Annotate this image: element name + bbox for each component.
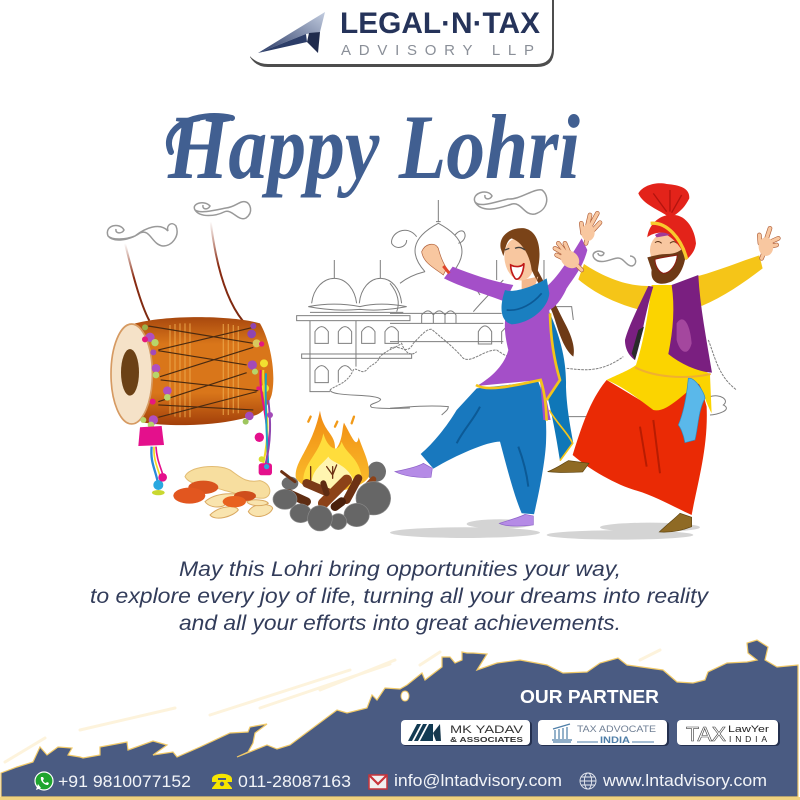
raised hand (581, 213, 600, 243)
icon: globe (580, 773, 596, 789)
drum with straps (111, 222, 273, 495)
logo icon: paper plane (258, 12, 325, 53)
woman smile (511, 263, 524, 279)
partners heading: OUR PARTNER (520, 686, 659, 707)
inner flame (303, 433, 362, 490)
decorative clouds (107, 190, 636, 266)
drum face hole (121, 349, 139, 396)
drum lacing (148, 326, 258, 417)
logo plate (248, 0, 554, 67)
torn paper notch (401, 691, 409, 701)
raised arm with sleeve (542, 238, 587, 311)
flame core (312, 457, 353, 490)
title: Happy Lohri (167, 96, 580, 198)
man eyes (655, 241, 677, 243)
dancing woman (395, 213, 600, 526)
ground shadows (390, 519, 700, 540)
contact bar (35, 771, 767, 791)
woman eye (505, 247, 525, 250)
MK mark (408, 724, 441, 741)
snacks: peanuts and rewri (173, 467, 273, 518)
footer torn panel (1, 640, 798, 797)
temple line art (297, 260, 417, 409)
neck and face (522, 277, 538, 292)
INDIA small: INDIA (729, 734, 767, 744)
website: www.lntadvisory.com (602, 771, 767, 790)
MK Yadav subtitle: & ASSOCIATES (450, 735, 523, 744)
columns icon (552, 724, 572, 742)
greeting line 2: to explore every joy of life, turning all your dreams into reality (90, 584, 709, 608)
drum right tassel (255, 370, 273, 475)
front rocks (273, 482, 391, 531)
left arm (578, 264, 650, 311)
vest (668, 275, 712, 373)
blue cloth (678, 378, 705, 443)
back rocks (282, 462, 386, 490)
landline: 011-28087163 (238, 772, 351, 791)
turban fan (638, 183, 689, 217)
icon: telephone (212, 774, 232, 789)
drum pale stripes (170, 323, 238, 417)
braid (533, 268, 574, 357)
partner: Tax Lawyer India (677, 720, 780, 746)
kurta yellow trim (476, 313, 560, 421)
icon: whatsapp (35, 772, 53, 790)
turban (647, 215, 696, 260)
logs (282, 465, 373, 507)
drum face (111, 324, 152, 424)
woman shoes (395, 463, 432, 478)
dupatta at neck (502, 278, 549, 324)
partner: MK Yadav (401, 720, 532, 746)
left hand (555, 243, 583, 272)
LawYer: LawYer (728, 724, 769, 735)
left arm with sleeve (444, 267, 513, 302)
TAX outlined: TAX (686, 724, 726, 746)
drum left tassel (138, 426, 167, 495)
left fist (422, 244, 447, 275)
right arm (695, 255, 763, 306)
greeting line 1: May this Lohri bring opportunities your way, (179, 557, 621, 581)
rear dupatta (547, 312, 573, 461)
greeting message (90, 557, 709, 635)
bonfire (273, 411, 391, 531)
flames (296, 411, 369, 491)
man smile (655, 255, 677, 273)
drum straps (125, 222, 243, 321)
brush stroke highlights (5, 650, 660, 762)
logo wordmark: LEGAL·N·TAX (340, 7, 540, 40)
right hand (759, 228, 778, 258)
neck and face (650, 233, 683, 267)
greeting line 3: and all your efforts into great achievements. (179, 611, 621, 635)
partner: Tax Advocate India (538, 720, 669, 746)
man shoes (548, 461, 589, 472)
kurta (477, 293, 560, 420)
phone number: +91 9810077152 (58, 772, 191, 791)
salwar (421, 382, 546, 514)
temple line art, central section (390, 200, 737, 417)
email: info@lntadvisory.com (394, 771, 562, 790)
Tax Advocate name: TAX ADVOCATE (577, 724, 656, 735)
drum body (133, 317, 273, 425)
dancing man (548, 183, 778, 532)
MK Yadav name: MK YADAV (450, 724, 524, 736)
footer bottom strip (0, 797, 800, 800)
drum pom-poms (140, 323, 269, 428)
dhoti (573, 380, 707, 515)
hair (500, 228, 540, 280)
kurta (607, 285, 712, 413)
beard (647, 245, 686, 284)
India label: INDIA (600, 735, 631, 745)
icon: mail (369, 775, 387, 789)
logo subtitle: ADVISORY LLP (341, 42, 534, 59)
